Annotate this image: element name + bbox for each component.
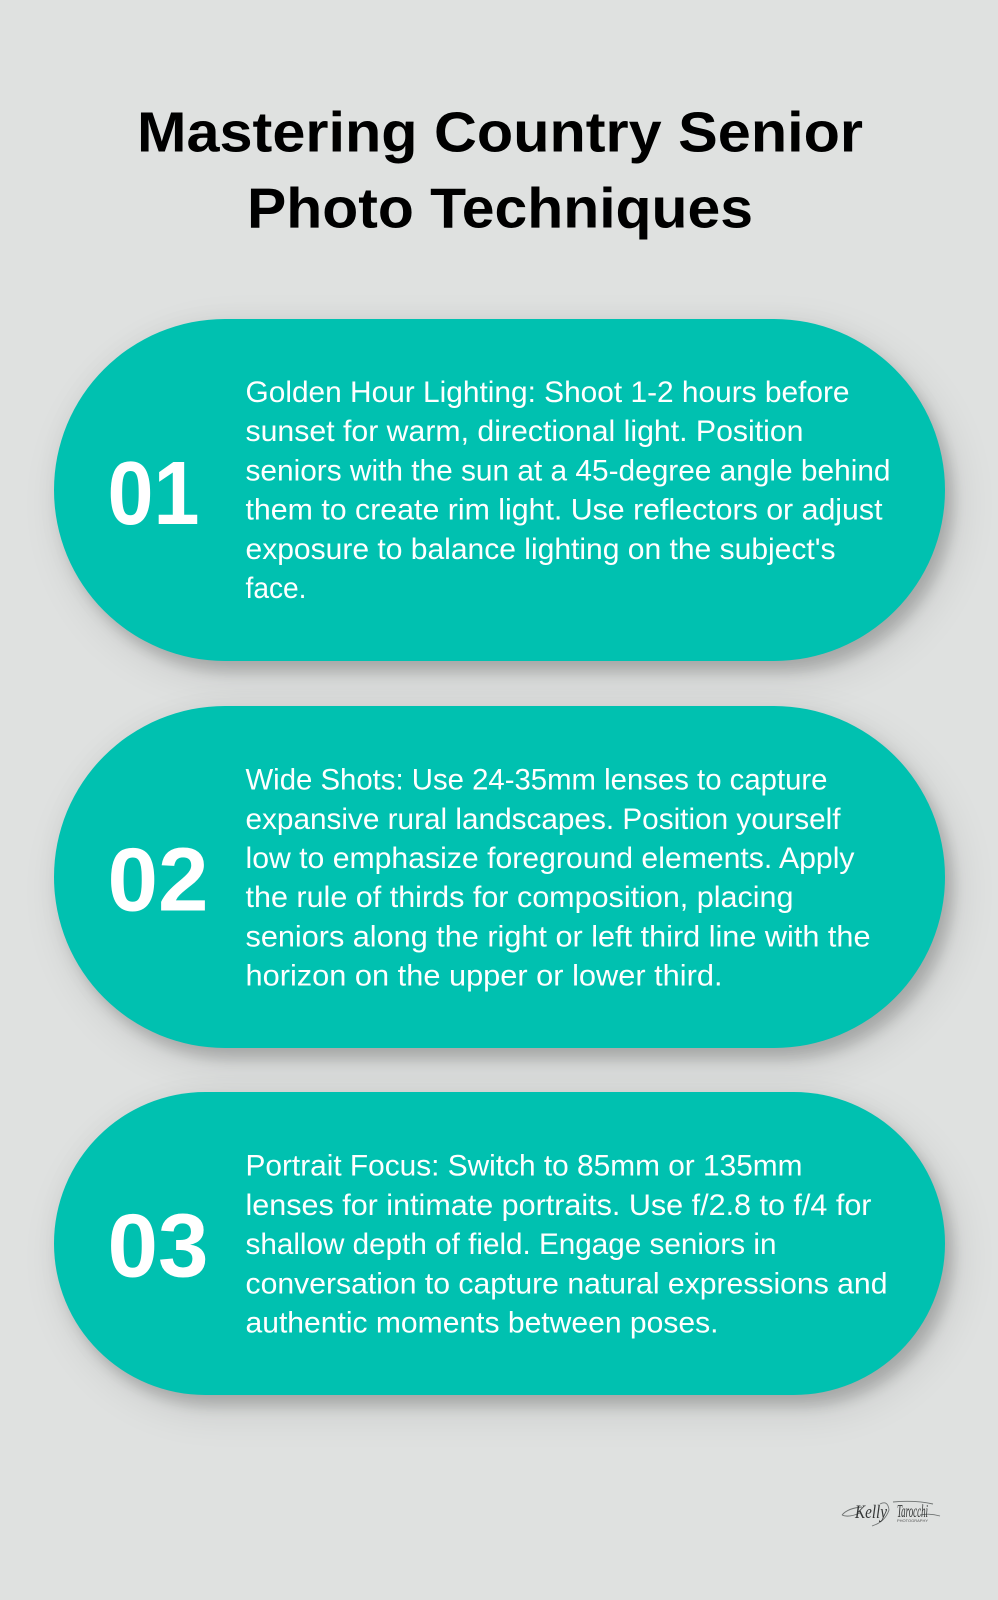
text block: golden hour lighting: them to create rim light. Use reflectors or adjust [245, 494, 882, 527]
text block: wide shots: Wide Shots: Use 24-35mm lenses to capture [245, 763, 827, 796]
text block: wide shots: seniors along the right or left third line with the [245, 920, 870, 953]
text block: wide shots [245, 763, 870, 992]
logo: signature [842, 1500, 940, 1526]
text block: golden hour lighting: Golden Hour Lighting: Shoot 1-2 hours before [245, 376, 849, 409]
text block: wide shots: expansive rural landscapes. Position yourself [245, 802, 841, 835]
panel: step 03 portrait focus [54, 1092, 944, 1395]
step number 01: 01 [107, 444, 199, 544]
text block: portrait focus: authentic moments between poses. [245, 1307, 718, 1340]
title: Mastering Country Senior [137, 100, 863, 164]
logo: signature: Tarocchi [897, 1501, 928, 1521]
title: Photo Techniques [247, 176, 753, 240]
logo: signature: Kelly [854, 1502, 887, 1523]
text block: golden hour lighting: face. [245, 572, 306, 605]
title [137, 100, 863, 240]
panel: step 01 golden hour lighting [54, 319, 944, 661]
step number 02: 02 [107, 830, 208, 930]
text block: portrait focus: lenses for intimate portraits. Use f/2.8 to f/4 for [245, 1189, 871, 1222]
panel: step 02 wide shots [54, 706, 944, 1048]
text block: wide shots: the rule of thirds for composition, placing [245, 881, 793, 914]
text block: golden hour lighting: exposure to balance lighting on the subject's [245, 533, 835, 566]
text block: portrait focus: Portrait Focus: Switch to 85mm or 135mm [245, 1150, 802, 1183]
text block: portrait focus: shallow depth of field. Engage seniors in [245, 1228, 776, 1261]
text block: wide shots: low to emphasize foreground elements. Apply [245, 842, 854, 875]
text block: golden hour lighting [245, 376, 890, 605]
text block: portrait focus: conversation to capture natural expressions and [245, 1268, 887, 1301]
text block: golden hour lighting: sunset for warm, directional light. Position [245, 415, 803, 448]
text block: golden hour lighting: seniors with the sun at a 45-degree angle behind [245, 454, 890, 487]
step number 03: 03 [107, 1197, 208, 1297]
text block: wide shots: horizon on the upper or lower third. [245, 959, 722, 992]
logo: signature: PHOTOGRAPHY [897, 1519, 929, 1523]
text block: portrait focus [245, 1150, 887, 1340]
